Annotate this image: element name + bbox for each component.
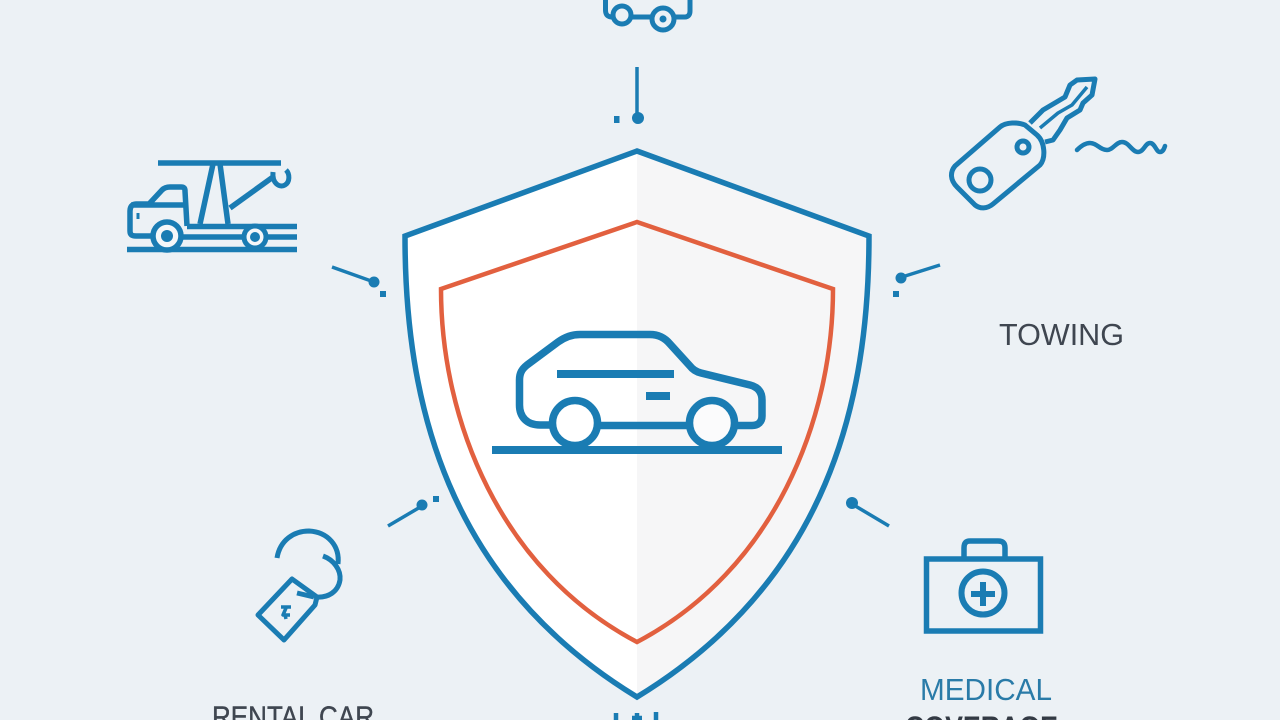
- vehicle body: [606, 0, 690, 17]
- arm: [230, 177, 273, 208]
- grill: [136, 213, 140, 219]
- hook: [273, 170, 289, 186]
- connector: upper left: [332, 267, 386, 297]
- kit cross: [971, 582, 995, 606]
- front wheel: [153, 222, 181, 250]
- car door handle: [646, 392, 670, 400]
- kit handle: [964, 541, 1005, 558]
- fob small hole: [1017, 141, 1029, 153]
- connector: lower left: [388, 496, 439, 526]
- vehicle right wheel: [652, 8, 674, 30]
- connector: lower right: [846, 497, 889, 526]
- icon: top vehicle: [606, 0, 690, 30]
- car right wheel: [690, 400, 734, 446]
- car left wheel: [552, 400, 598, 446]
- car body: [520, 334, 762, 426]
- ring lower loop: [316, 556, 340, 597]
- ground line: [492, 446, 782, 454]
- fob large button: [969, 169, 991, 191]
- icon: medical kit: [926, 541, 1040, 631]
- car window line: [557, 370, 674, 378]
- icon: tow truck: [127, 163, 297, 250]
- icon: car key: [951, 79, 1165, 208]
- shield: outer body: [405, 151, 869, 697]
- road line: [127, 247, 297, 252]
- key groove: [1040, 87, 1087, 128]
- tag: [258, 579, 317, 640]
- key blade: [1030, 79, 1095, 142]
- shield: [405, 151, 869, 697]
- shield: outer blue outline: [405, 151, 869, 697]
- icon: rental car key tag: [258, 531, 340, 640]
- label: medical: MEDICAL: [920, 672, 1052, 707]
- mast: [200, 164, 228, 224]
- ring: [277, 531, 338, 564]
- label: towing: TOWING: [999, 317, 1124, 352]
- truck bed rails: [182, 226, 297, 237]
- rear wheel: [244, 226, 266, 248]
- key fob: [951, 123, 1044, 208]
- shield: inner red outline: [441, 222, 833, 642]
- wave line: [1077, 142, 1165, 152]
- connector: upper right: [893, 265, 940, 297]
- vehicle hub: [660, 16, 666, 22]
- tag knot: [297, 593, 314, 597]
- shield: shaded right half: [637, 151, 869, 697]
- connector: top: [614, 67, 644, 124]
- tag mark: [281, 607, 291, 619]
- vehicle left wheel: [613, 6, 631, 24]
- kit case: [926, 559, 1040, 631]
- boom bar: [158, 160, 281, 166]
- icon: central car: [492, 334, 782, 450]
- cab: [130, 187, 187, 236]
- car sill: [600, 422, 688, 429]
- icon: bottom partial: [616, 712, 656, 720]
- kit cross circle: [962, 572, 1004, 614]
